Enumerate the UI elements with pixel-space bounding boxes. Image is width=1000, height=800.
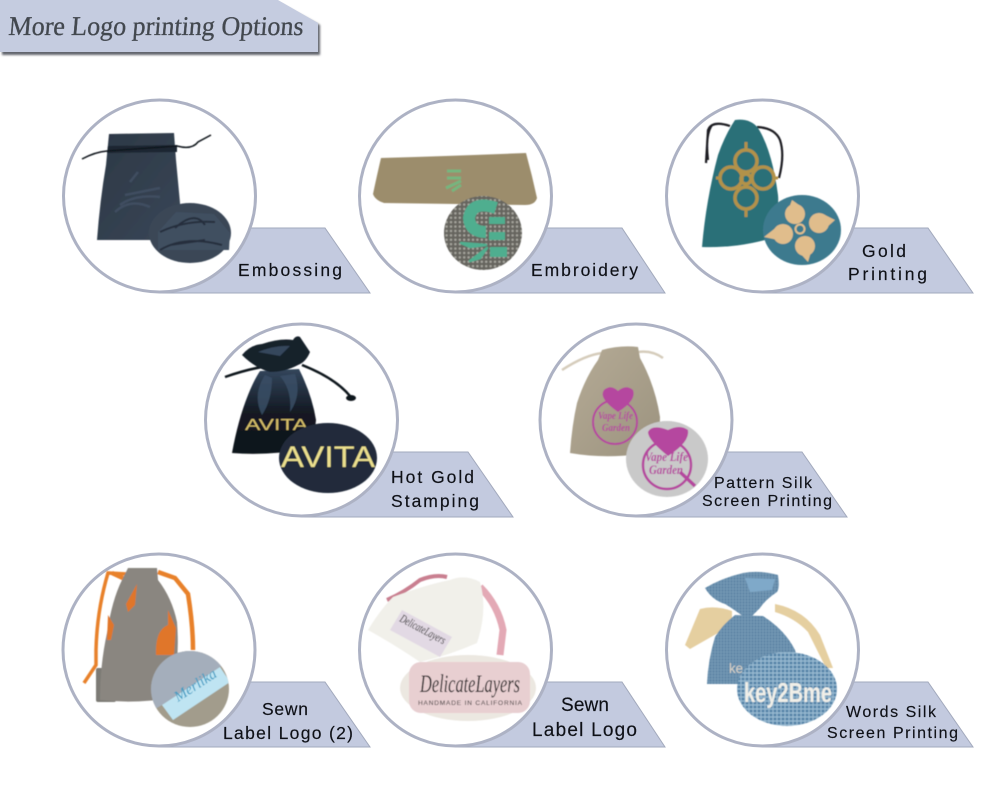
label: Sewn Label Logo: Label Logo xyxy=(532,720,637,741)
circle frame xyxy=(360,554,552,746)
photo: embroidered jute case xyxy=(373,153,537,270)
label: Sewn Label Logo (2): Sewn xyxy=(262,699,308,719)
photo: white pouch with woven label xyxy=(368,576,536,721)
photo: black satin pouch with gold logo xyxy=(225,336,377,493)
label: Gold Printing: Printing xyxy=(848,264,927,284)
label: Pattern Silk Screen Printing: Pattern Silk xyxy=(714,475,813,492)
label: Words Silk Screen Printing xyxy=(827,704,958,742)
circle frame xyxy=(63,554,255,746)
panel: sewn label logo 2 xyxy=(63,554,370,747)
label: Embossing: Embossing xyxy=(238,260,342,280)
photo: blue burlap pouch with white print: key2Bme xyxy=(744,677,832,708)
label tab xyxy=(763,228,973,293)
circle frame xyxy=(666,100,858,292)
label: Words Silk Screen Printing: Words Silk xyxy=(846,704,937,721)
panel: sewn label logo xyxy=(360,554,665,747)
photo: teal jute pouch with gold print xyxy=(702,120,841,265)
photo: embossed dark pouch xyxy=(82,133,231,263)
circle frame xyxy=(540,324,732,516)
panel: hot gold stamping xyxy=(206,324,513,517)
label: Hot Gold Stamping xyxy=(391,467,479,511)
photo: linen pouch with pink print: Garden xyxy=(602,422,630,434)
label: Sewn Label Logo: Sewn xyxy=(561,695,609,716)
photo: linen pouch with pink print: Garden xyxy=(649,462,683,477)
photo: white pouch with woven label: DelicateLayers xyxy=(419,671,520,698)
label tab xyxy=(302,452,513,517)
circle frame xyxy=(360,100,552,292)
photo: black satin pouch with gold logo: AVITA xyxy=(245,417,308,434)
photo: linen pouch with pink print: Vape Life xyxy=(645,449,688,464)
label: Embroidery: Embroidery xyxy=(531,260,638,280)
photo: linen pouch with pink print: Vape Life xyxy=(598,410,633,422)
label: Hot Gold Stamping: Stamping xyxy=(391,491,479,511)
label tab xyxy=(456,228,665,293)
title banner: More Logo printing Options xyxy=(7,11,305,41)
label: Gold Printing: Gold xyxy=(862,241,906,261)
photo: linen pouch with pink print xyxy=(562,346,708,497)
panel: pattern silk screen printing xyxy=(540,324,847,517)
label tab xyxy=(159,682,370,747)
panel: gold printing xyxy=(666,100,973,293)
label: Hot Gold Stamping: Hot Gold xyxy=(391,467,474,487)
label: Sewn Label Logo (2) xyxy=(223,699,353,743)
panel: embroidery xyxy=(360,100,665,293)
title banner xyxy=(0,0,320,55)
photo: blue burlap pouch with white print: ke xyxy=(729,660,743,676)
label: Sewn Label Logo xyxy=(532,695,637,741)
label: Gold Printing xyxy=(848,241,927,284)
photo: grey pouch with orange ribbon xyxy=(84,568,232,728)
panel: embossing xyxy=(64,100,370,293)
label tab xyxy=(160,228,370,293)
circle frame xyxy=(666,554,858,746)
photo: white pouch with woven label: HANDMADE IN CALIFORNIA xyxy=(418,700,523,707)
label: Pattern Silk Screen Printing xyxy=(702,475,832,510)
circle frame xyxy=(206,324,398,516)
photo: blue burlap pouch with white print xyxy=(685,572,837,726)
label tab xyxy=(763,682,973,747)
photo: white pouch with woven label: DelicateLayers xyxy=(397,611,449,647)
label: Pattern Silk Screen Printing: Screen Printing xyxy=(702,493,832,510)
label: Sewn Label Logo (2): Label Logo (2) xyxy=(223,723,353,743)
label: Words Silk Screen Printing: Screen Printing xyxy=(827,725,958,742)
panel: words silk screen printing xyxy=(666,554,973,747)
photo: black satin pouch with gold logo: AVITA xyxy=(281,441,375,474)
label tab xyxy=(636,452,847,517)
circle frame xyxy=(64,100,256,292)
photo: grey pouch with orange ribbon: Merlika xyxy=(171,666,220,706)
label tab xyxy=(456,682,665,747)
